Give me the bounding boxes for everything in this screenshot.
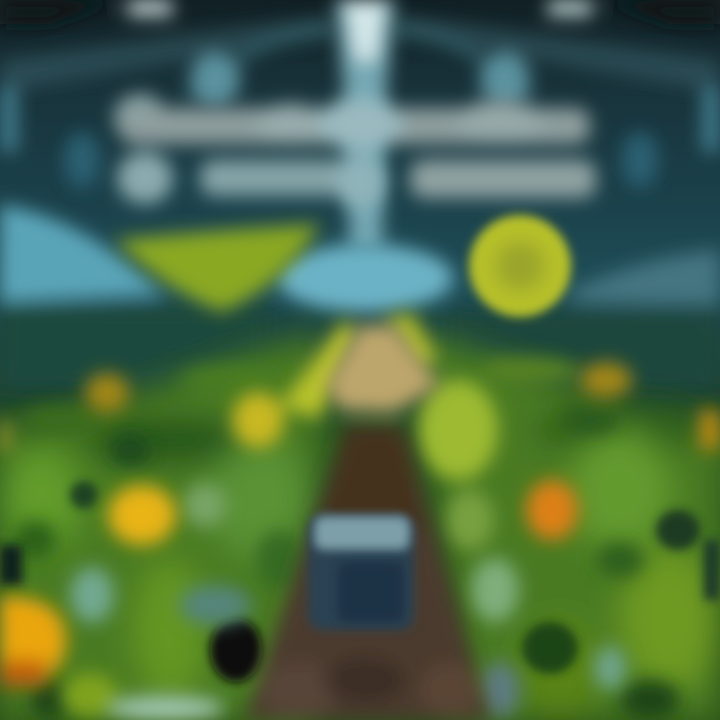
dark gaps between crops bbox=[0, 481, 720, 682]
soil path bbox=[245, 325, 490, 720]
flower: orange blooms bbox=[0, 362, 720, 686]
crop mottling bbox=[13, 358, 680, 720]
icon: yellow circle badge bbox=[469, 215, 571, 317]
horizon sky and water bbox=[0, 205, 720, 390]
blurred title bbox=[114, 94, 596, 208]
icon: green leaf bbox=[115, 224, 320, 312]
pale blue-green foliage highlights bbox=[70, 483, 626, 720]
bright crop leaves bbox=[62, 312, 498, 717]
water column bbox=[335, 0, 395, 250]
device on path bbox=[308, 515, 414, 630]
field of green crops bbox=[0, 330, 720, 720]
greenhouse roof structure bbox=[0, 0, 720, 188]
